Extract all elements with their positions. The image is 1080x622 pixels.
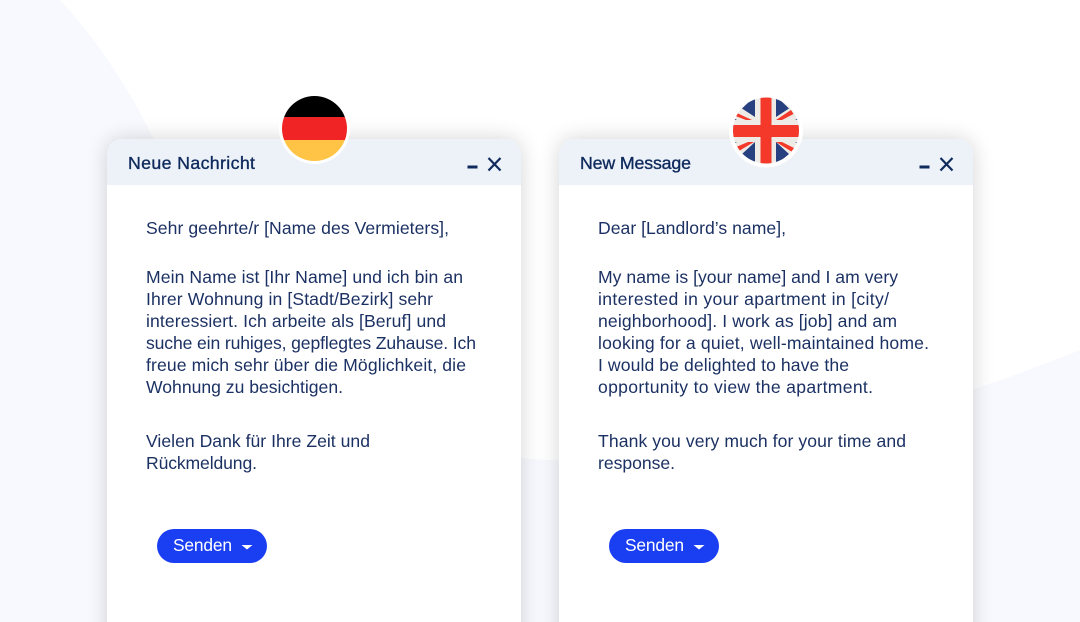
- German letter text: [146, 218, 476, 473]
- German letter text: suche ein ruhiges, gepflegtes Zuhause. Ich: [146, 333, 476, 353]
- icon: close: [940, 158, 952, 170]
- icon: close: [488, 158, 500, 170]
- German heading: Neue Nachricht: [128, 153, 255, 173]
- icon: minimize: [920, 166, 930, 168]
- English letter text: looking for a quiet, well-maintained home.: [598, 333, 929, 353]
- English header bar: [559, 139, 973, 185]
- English letter text: interested in your apartment in [city/: [598, 289, 889, 309]
- German send button: [157, 529, 267, 563]
- panel: English message: [559, 139, 973, 622]
- icon: UK flag: [729, 94, 803, 168]
- German letter text: Mein Name ist [Ihr Name] und ich bin an: [146, 267, 463, 287]
- English letter text: Dear [Landlord’s name],: [598, 218, 786, 238]
- German letter text: interessiert. Ich arbeite als [Beruf] und: [146, 311, 446, 331]
- German letter text: freue mich sehr über die Möglichkeit, die: [146, 355, 466, 375]
- German send button: Senden: [173, 535, 232, 555]
- panel: German message: [107, 139, 521, 622]
- English letter text: [598, 218, 929, 473]
- German letter text: Vielen Dank für Ihre Zeit und: [146, 431, 370, 451]
- English letter text: My name is [your name] and I am very: [598, 267, 898, 287]
- English heading: New Message: [580, 153, 691, 173]
- English send button: Senden: [625, 535, 684, 555]
- German letter text: Rückmeldung.: [146, 453, 257, 473]
- English letter text: I would be delighted to have the: [598, 355, 849, 375]
- icon: German flag: [279, 93, 350, 164]
- English letter text: Thank you very much for your time and: [598, 431, 906, 451]
- German header bar: [107, 139, 521, 185]
- German letter text: Ihrer Wohnung in [Stadt/Bezirk] sehr: [146, 289, 433, 309]
- English letter text: response.: [598, 453, 675, 473]
- German letter text: Sehr geehrte/r [Name des Vermieters],: [146, 218, 449, 238]
- German letter text: Wohnung zu besichtigen.: [146, 377, 343, 397]
- English send button: [609, 529, 719, 563]
- English letter text: neighborhood]. I work as [job] and am: [598, 311, 897, 331]
- icon: minimize: [468, 166, 478, 168]
- English letter text: opportunity to view the apartment.: [598, 377, 873, 397]
